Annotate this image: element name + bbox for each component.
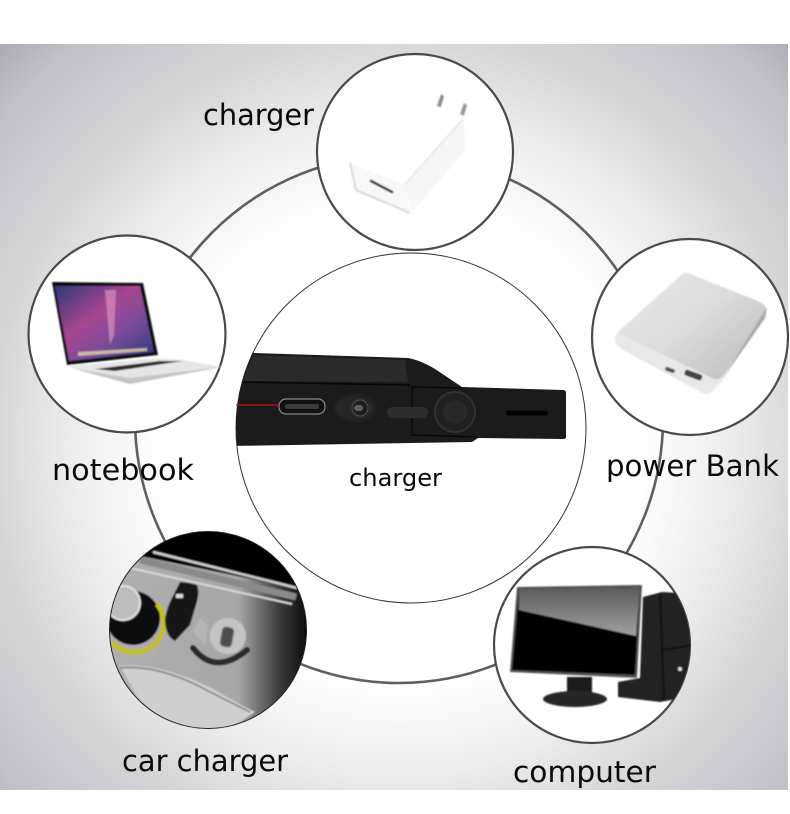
port: USB-C: [279, 399, 325, 414]
label: center charger: charger: [349, 464, 442, 492]
device: black charger side view: [230, 353, 566, 446]
black cap: [165, 582, 198, 641]
stand: [543, 677, 607, 707]
label: charger: charger: [203, 98, 314, 132]
indicator light: [352, 400, 368, 416]
photo: car socket: [105, 528, 311, 735]
flap tab: [387, 407, 428, 418]
socket: [193, 618, 247, 663]
slot port: [506, 410, 548, 416]
icon: power bank: [615, 273, 767, 394]
red pointer line: [236, 404, 279, 406]
icon: wall charger: [350, 94, 467, 213]
monitor: [510, 585, 642, 678]
circle: central charger device: [230, 253, 586, 603]
label: power Bank: power Bank: [606, 449, 779, 483]
round button: [435, 392, 475, 432]
circle: car charger: [105, 528, 311, 735]
circle: computer: [494, 547, 700, 743]
icon: laptop: [52, 282, 222, 384]
tower: [618, 592, 700, 702]
connecting ring: [135, 155, 663, 683]
photo: desktop computer: [510, 585, 700, 707]
bottom white strip: [0, 790, 790, 814]
circle: power bank: [592, 239, 788, 435]
label: computer: computer: [513, 755, 656, 789]
circle: notebook: [28, 236, 226, 432]
circle: wall charger: [317, 54, 513, 250]
yellow ring socket: [106, 586, 164, 652]
label: notebook: notebook: [52, 453, 194, 487]
label: car charger: car charger: [122, 744, 288, 778]
